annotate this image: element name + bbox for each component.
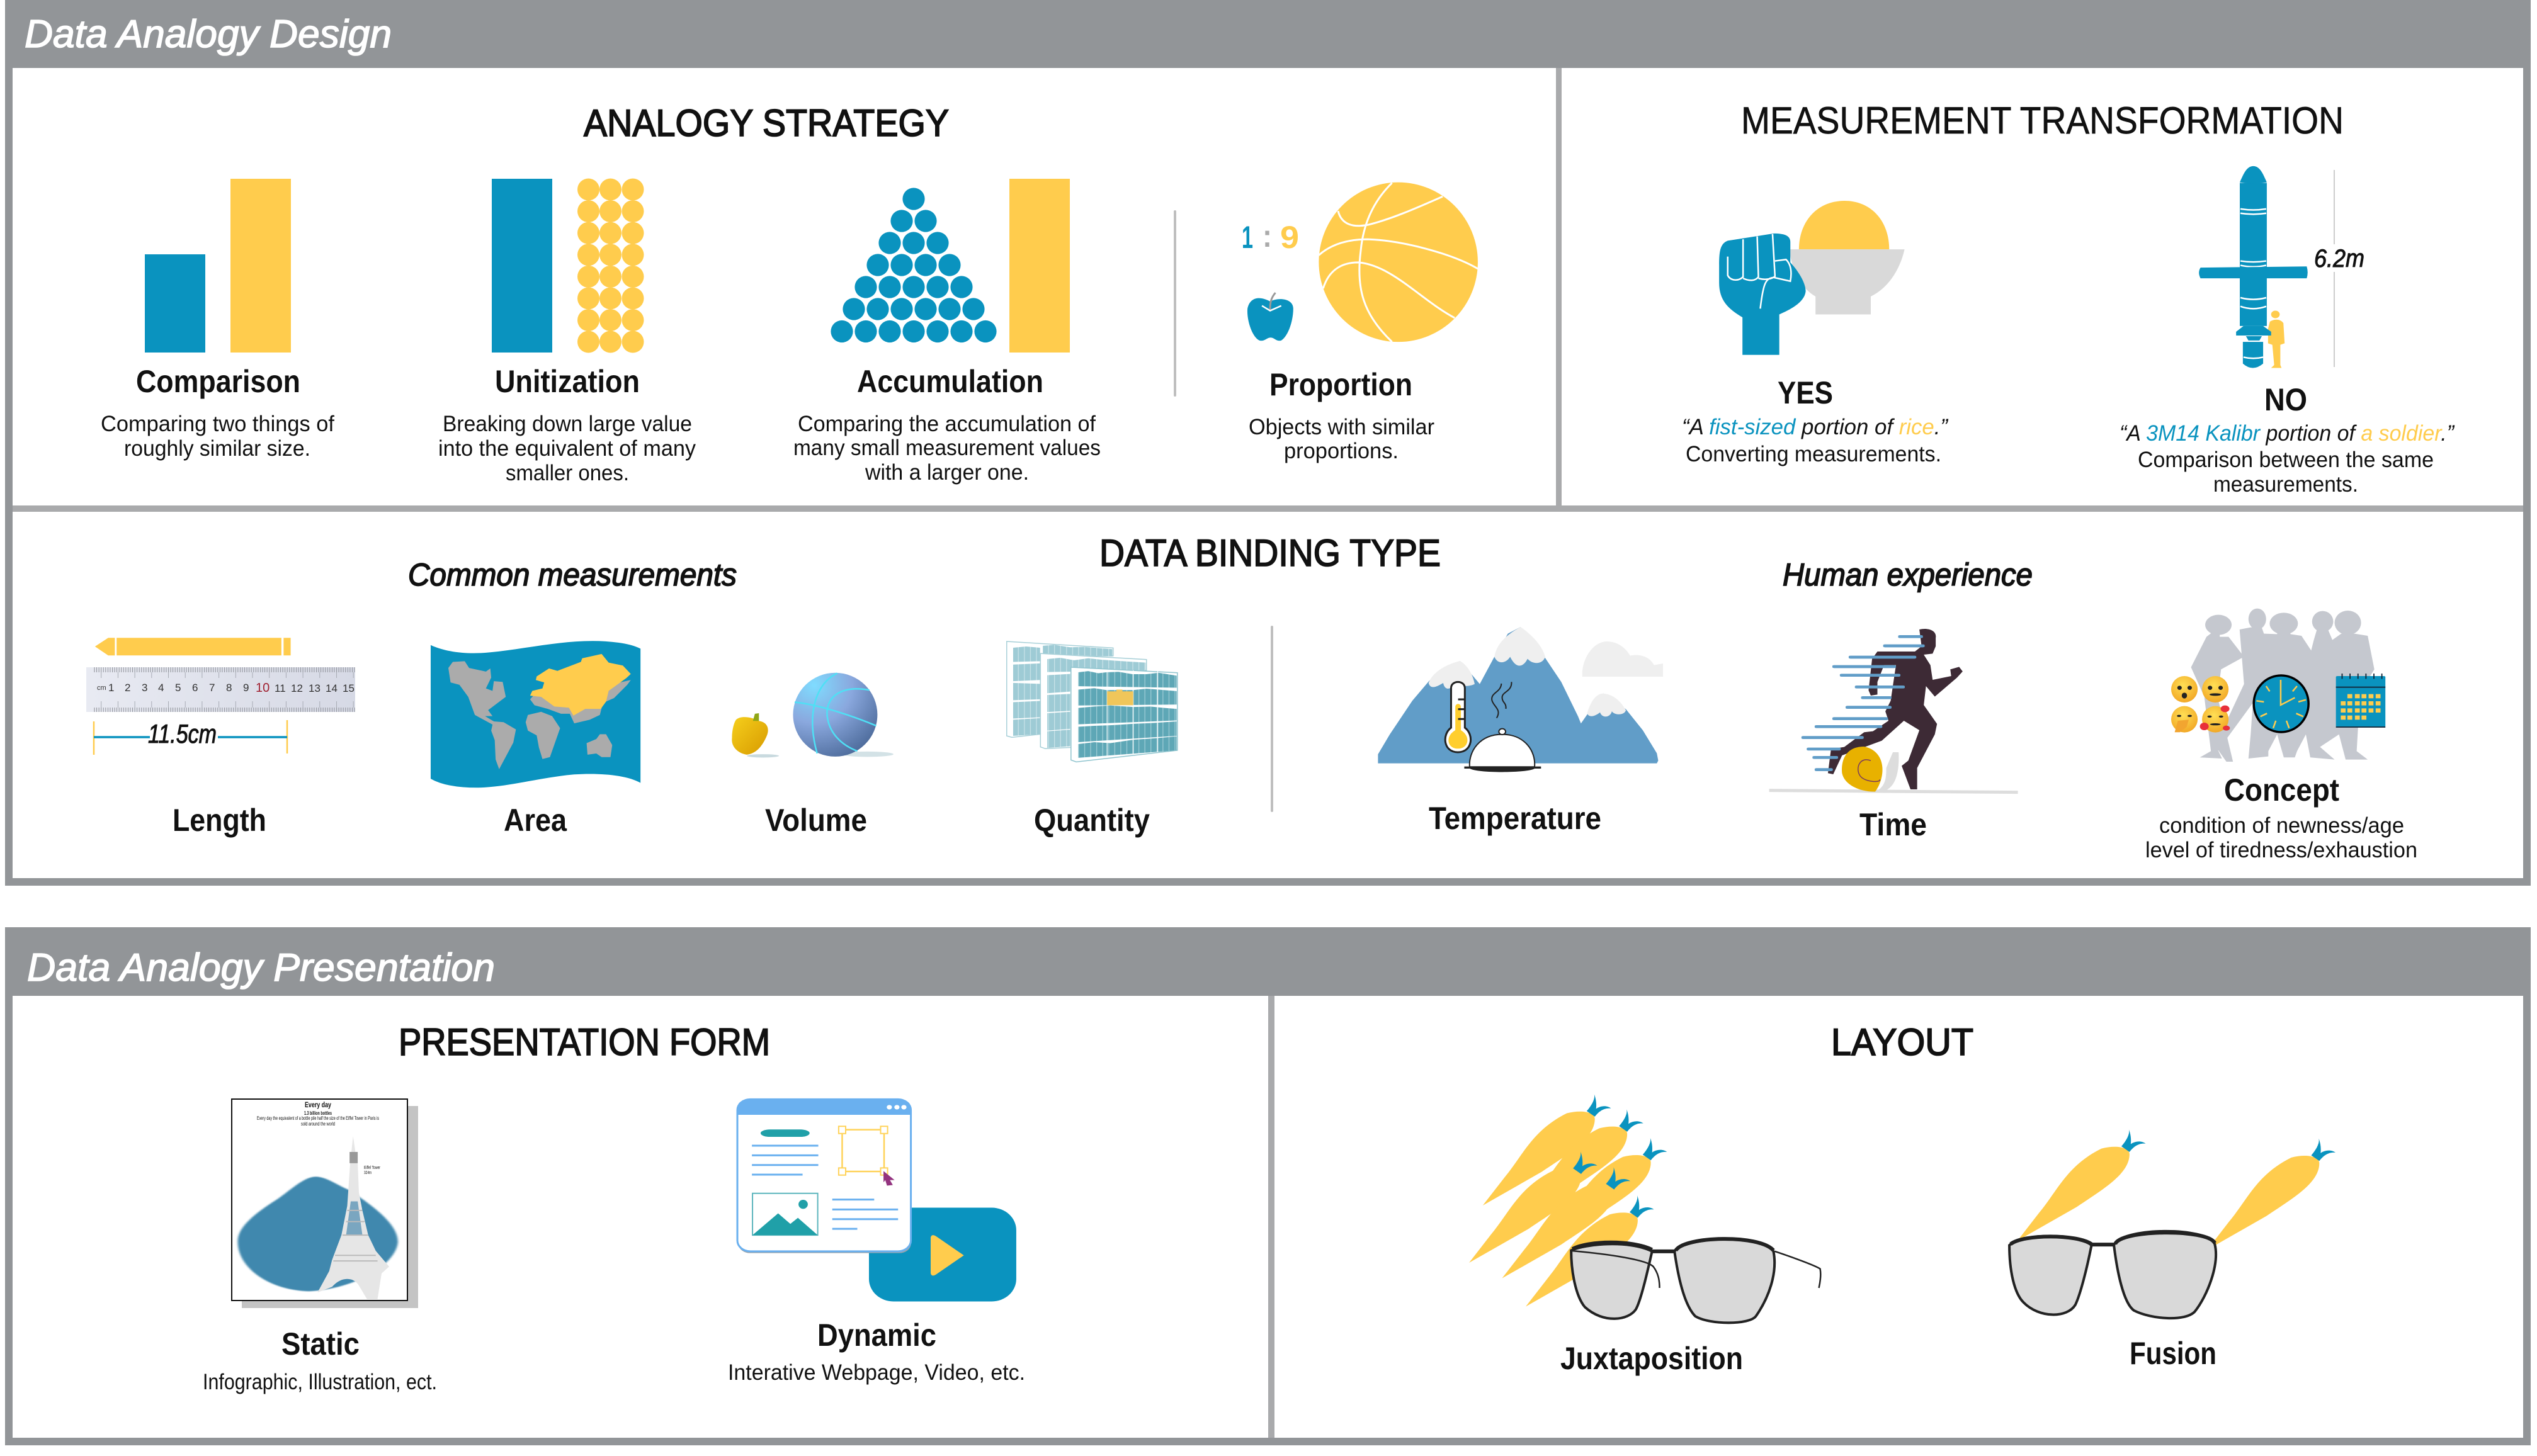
- icon: fusion carrots and glasses: [2009, 1129, 2336, 1318]
- label: 6.2m: 6.2m: [2314, 245, 2364, 273]
- description: concept: [2145, 813, 2417, 862]
- icon: ruler: 9: [243, 682, 249, 694]
- icon: basketball: [1319, 183, 1478, 342]
- description: proportion: Objects with similar: [1249, 415, 1434, 439]
- dimension line: [2334, 170, 2335, 367]
- icon: mountains, thermometer and cloche: [1378, 627, 1663, 772]
- icon: ruler: 13: [309, 682, 321, 694]
- description: dynamic: Interative Webpage, Video, etc.: [728, 1360, 1025, 1385]
- description: concept: condition of newness/age: [2159, 813, 2404, 838]
- icon: ruler: 5: [175, 682, 181, 694]
- label: unitization: Unitization: [495, 364, 640, 399]
- icon: apple: [1247, 293, 1293, 341]
- label: quantity: Quantity: [1034, 803, 1150, 838]
- icon: runner, snail and speed lines: [1769, 629, 2018, 793]
- quote: fist-sized rice: “A fist-sized portion of rice.”: [1682, 415, 1948, 439]
- icon: missile and soldier: [2199, 166, 2308, 368]
- icon: static infographic page: Every day: [305, 1100, 331, 1109]
- icon: pepper and basketball volume: [732, 673, 894, 757]
- section title: Data Analogy Design: Data Analogy Design: [25, 13, 392, 56]
- heading: presentation form: PRESENTATION FORM: [399, 1021, 770, 1063]
- ratio: 1 to 9: 9: [1280, 220, 1299, 255]
- label: area: Area: [504, 803, 567, 838]
- description: comparison: roughly similar size.: [124, 436, 310, 461]
- icon: webpage and video: [737, 1099, 1016, 1301]
- description: accumulation: with a larger one.: [865, 460, 1029, 485]
- heading: measurement transformation: MEASUREMENT TRANSFORMATION: [1741, 99, 2344, 142]
- panel: analogy strategy: [101, 102, 1478, 485]
- icon: fist and rice bowl: [1719, 201, 1905, 355]
- label: accumulation: Accumulation: [857, 364, 1043, 399]
- description: unitization: Breaking down large value: [443, 412, 692, 436]
- dimension: 11.5cm: 11.5cm: [148, 719, 217, 748]
- label: fusion: Fusion: [2130, 1336, 2216, 1371]
- section title: Data Analogy Presentation: Data Analogy Presentation: [27, 946, 495, 990]
- icon: bookshelves quantity: [1007, 641, 1178, 762]
- icon: ruler: [86, 667, 355, 712]
- description: accumulation: [793, 412, 1101, 485]
- icon: ruler: 7: [209, 682, 215, 694]
- icon: static infographic page: 1.3 billion bottles: [304, 1110, 332, 1116]
- label: static: Static: [281, 1326, 360, 1362]
- description: converting measurements: Converting measurements.: [1686, 442, 1941, 466]
- label: proportion: Proportion: [1269, 367, 1412, 402]
- label: dynamic: Dynamic: [817, 1318, 936, 1353]
- panel: presentation form: [203, 1021, 1025, 1394]
- quote: 3M14 Kalibr soldier: “A 3M14 Kalibr portion of a soldier.”: [2120, 421, 2455, 446]
- icon: ruler: 15: [343, 682, 355, 694]
- description: unitization: smaller ones.: [506, 461, 629, 485]
- icon: ruler: cm: [97, 684, 106, 692]
- heading: layout: LAYOUT: [1831, 1021, 1973, 1063]
- panel: data binding type: [86, 532, 2417, 862]
- icon: ruler: 4: [158, 682, 164, 694]
- ratio: 1 to 9: 1: [1242, 220, 1253, 255]
- icon: ruler: 12: [291, 682, 303, 694]
- description: comparison: [101, 412, 334, 461]
- heading: data binding type: DATA BINDING TYPE: [1099, 532, 1441, 574]
- icon: people silhouettes with emoji, clock and calendar: [2171, 609, 2385, 762]
- description: unitization: into the equivalent of many: [438, 436, 696, 461]
- label: comparison: Comparison: [136, 364, 300, 399]
- icon: ruler: 1: [108, 682, 114, 694]
- subheading: common measurements: Common measurements: [408, 557, 737, 592]
- description: accumulation: Comparing the accumulation of: [798, 412, 1096, 436]
- icon: juxtaposition carrots and glasses: [1469, 1094, 1820, 1323]
- icon: accumulation pyramid and bar: [831, 179, 1070, 353]
- icon: unitization bar and dots: [492, 179, 644, 353]
- subheading: human experience: Human experience: [1783, 557, 2033, 592]
- description: concept: level of tiredness/exhaustion: [2145, 838, 2417, 862]
- description: comparison: Comparing two things of: [101, 412, 334, 436]
- label: length: Length: [173, 803, 266, 838]
- label: temperature: Temperature: [1429, 801, 1601, 836]
- icon: comparison bars: [145, 179, 291, 353]
- icon: ruler: 14: [326, 682, 338, 694]
- icon: static infographic page: [232, 1099, 418, 1308]
- icon: world map flag: [431, 641, 640, 787]
- label: yes: YES: [1778, 375, 1833, 410]
- label: concept: Concept: [2224, 772, 2339, 808]
- description: same measurements: Comparison between the same: [2138, 448, 2434, 472]
- description: unitization: [438, 412, 696, 485]
- dimension: 11.5cm: [94, 719, 287, 755]
- icon: ruler: 2: [125, 682, 130, 694]
- icon: ruler: 8: [226, 682, 232, 694]
- ratio: 1 to 9: :: [1263, 218, 1272, 254]
- ratio: 1 to 9: [1242, 218, 1299, 255]
- description: proportion: proportions.: [1284, 439, 1399, 463]
- panel: data analogy design frame: [5, 0, 2531, 886]
- icon: ruler: 6: [192, 682, 198, 694]
- icon: static infographic page: Eiffel Tower: [364, 1166, 380, 1170]
- label: time: Time: [1859, 807, 1927, 842]
- label: juxtaposition: Juxtaposition: [1560, 1341, 1743, 1376]
- description: same measurements: measurements.: [2213, 472, 2358, 497]
- label: volume: Volume: [765, 803, 867, 838]
- icon: ruler: 11: [275, 682, 286, 694]
- description: accumulation: many small measurement values: [793, 436, 1101, 460]
- icon: ruler: 10: [256, 681, 270, 695]
- panel: measurement transformation: [1682, 99, 2455, 497]
- panel: data analogy presentation frame: [5, 927, 2531, 1445]
- description: same measurements: [2138, 448, 2434, 497]
- description: proportion: [1249, 415, 1434, 463]
- icon: static infographic page: Every day the equivalent of a bottle pile half the size of the Eiffel Tower in Paris is: [257, 1115, 379, 1121]
- icon: ruler: 3: [142, 682, 147, 694]
- icon: static infographic page: sold around the world: [301, 1121, 335, 1127]
- description: static: Infographic, Illustration, ect.: [203, 1370, 437, 1394]
- heading: analogy strategy: ANALOGY STRATEGY: [584, 102, 949, 144]
- panel: layout: [1469, 1021, 2336, 1376]
- icon: static infographic page: 324m: [364, 1171, 372, 1175]
- label: no: NO: [2264, 382, 2307, 417]
- icon: pencil: [95, 638, 291, 655]
